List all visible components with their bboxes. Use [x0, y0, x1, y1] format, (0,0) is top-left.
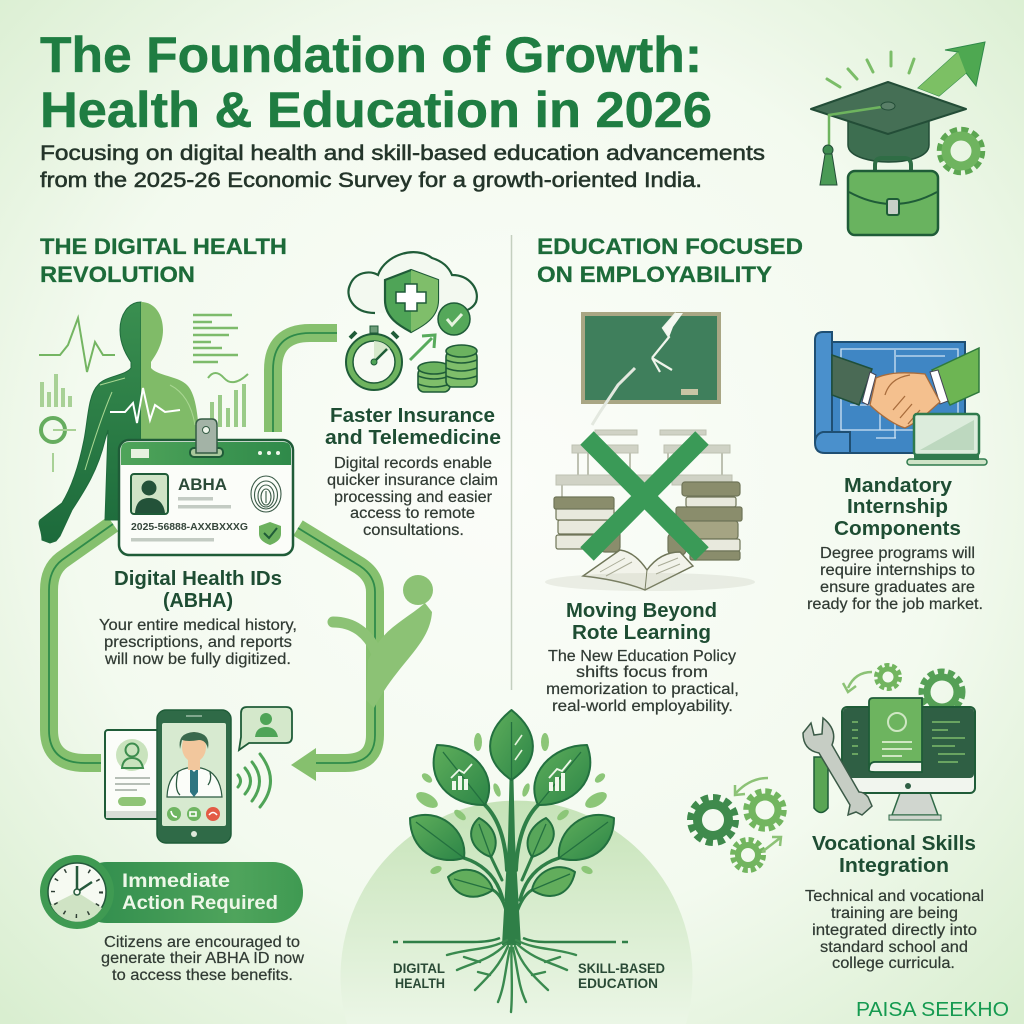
icon: graduation cap, briefcase, gear and arrow — [811, 42, 985, 235]
heading: digital health: THE DIGITAL HEALTH — [40, 234, 287, 259]
text: vocational skills: Integration — [839, 854, 949, 877]
icon: vocational gears — [691, 778, 784, 870]
icon: monitor, book and wrench — [803, 666, 975, 820]
text: vocational skills — [805, 832, 984, 972]
ground line — [393, 938, 628, 942]
callout: immediate action: Immediate — [122, 870, 230, 892]
text: digital health ids — [99, 567, 297, 668]
text: internship: require internships to — [820, 562, 975, 579]
icon: insurance and telemedicine — [346, 252, 477, 392]
text: digital health ids: prescriptions, and reports — [104, 634, 292, 651]
text: faster insurance — [325, 404, 501, 539]
trunk — [502, 780, 521, 945]
cross mark — [587, 438, 702, 554]
heading: digital health: REVOLUTION — [40, 262, 195, 287]
open book — [583, 550, 693, 590]
icon: ABHA card: ABHA — [178, 475, 227, 494]
text: vocational skills: training are being — [831, 905, 958, 922]
leaves — [410, 710, 614, 897]
text: faster insurance: and Telemedicine — [325, 426, 501, 449]
title: The Foundation of Growth: — [40, 27, 702, 83]
text: vocational skills: standard school and — [820, 939, 968, 956]
books left — [554, 497, 620, 552]
text: faster insurance: Faster Insurance — [330, 404, 495, 427]
divider — [510, 235, 512, 690]
label: skill-based education: EDUCATION — [578, 976, 658, 991]
text: rote learning: Moving Beyond — [566, 599, 717, 622]
text: action body — [101, 934, 305, 984]
text: faster insurance: quicker insurance claim — [327, 472, 498, 489]
text: internship: Degree programs will — [820, 545, 975, 562]
label: skill-based education: SKILL-BASED — [578, 961, 665, 976]
stems and branches — [464, 805, 559, 915]
watermark: paisa seekho: PAISA SEEKHO — [856, 999, 1009, 1021]
text: faster insurance: access to remote — [350, 505, 475, 522]
subtitle: Focusing on digital health and skill-based education advancements — [40, 142, 765, 165]
text: faster insurance: Digital records enable — [334, 455, 492, 472]
label: digital health — [393, 961, 445, 991]
text: digital health ids: will now be fully digitized. — [104, 651, 291, 668]
tree dome — [340, 801, 692, 1024]
text: internship: Components — [834, 517, 961, 540]
icon: telemedicine phone — [105, 707, 292, 843]
label: skill-based education — [578, 961, 665, 991]
connector paths — [49, 333, 375, 781]
icon: growth tree — [393, 710, 628, 1012]
chart glyphs on leaves — [452, 773, 565, 791]
roots — [447, 940, 576, 1012]
text: faster insurance: consultations. — [363, 522, 464, 539]
heading: education: ON EMPLOYABILITY — [537, 262, 772, 287]
text: rote learning: memorization to practical, — [546, 681, 739, 698]
text: rote learning: shifts focus from — [576, 664, 708, 681]
icon: sprout — [333, 575, 433, 708]
icon: human body with vitals — [39, 302, 248, 543]
text: vocational skills: Vocational Skills — [812, 832, 976, 855]
text: internship: ready for the job market. — [807, 596, 983, 613]
callout: immediate action — [40, 855, 303, 929]
text: rote learning — [546, 599, 739, 715]
text: faster insurance: processing and easier — [334, 489, 492, 506]
arrow head — [291, 748, 316, 781]
title — [40, 27, 712, 138]
label: digital health: HEALTH — [395, 976, 445, 991]
text: digital health ids: Digital Health IDs — [114, 567, 282, 590]
text: action body: Citizens are encouraged to — [104, 934, 300, 951]
label: digital health: DIGITAL — [393, 961, 445, 976]
icon: ABHA card — [119, 419, 293, 555]
text: internship: ensure graduates are — [820, 579, 975, 596]
desks — [556, 430, 732, 510]
text: rote learning: The New Education Policy — [548, 648, 736, 665]
heading: education: EDUCATION FOCUSED — [537, 234, 803, 259]
text: digital health ids: (ABHA) — [163, 589, 233, 612]
chalkboard — [583, 314, 719, 402]
icon: ABHA card: 2025-56888-AXXBXXXG — [131, 522, 248, 533]
text: internship — [807, 474, 983, 613]
text: rote learning: Rote Learning — [572, 621, 711, 644]
floating leaves — [414, 733, 609, 876]
icon: broken chalkboard, desks and books — [545, 313, 755, 591]
text: vocational skills: Technical and vocational — [805, 888, 984, 905]
text: vocational skills: college curricula. — [832, 955, 955, 972]
text: internship: Mandatory — [844, 474, 953, 497]
text: action body: generate their ABHA ID now — [101, 950, 305, 967]
text: internship: Internship — [847, 495, 948, 518]
subtitle — [40, 142, 765, 192]
callout: immediate action: Action Required — [122, 892, 278, 914]
text: action body: to access these benefits. — [112, 967, 293, 984]
title: Health & Education in 2026 — [40, 82, 712, 138]
icon: clock — [48, 863, 106, 922]
text: rote learning: real-world employability. — [552, 698, 733, 715]
icon: handshake on blueprint — [815, 332, 987, 465]
subtitle: from the 2025-26 Economic Survey for a growth-oriented India. — [40, 169, 702, 192]
books right — [668, 482, 742, 560]
text: digital health ids: Your entire medical history, — [99, 617, 297, 634]
text: vocational skills: integrated directly into — [812, 922, 977, 939]
heading: education — [537, 234, 803, 287]
heading: digital health — [40, 234, 287, 287]
